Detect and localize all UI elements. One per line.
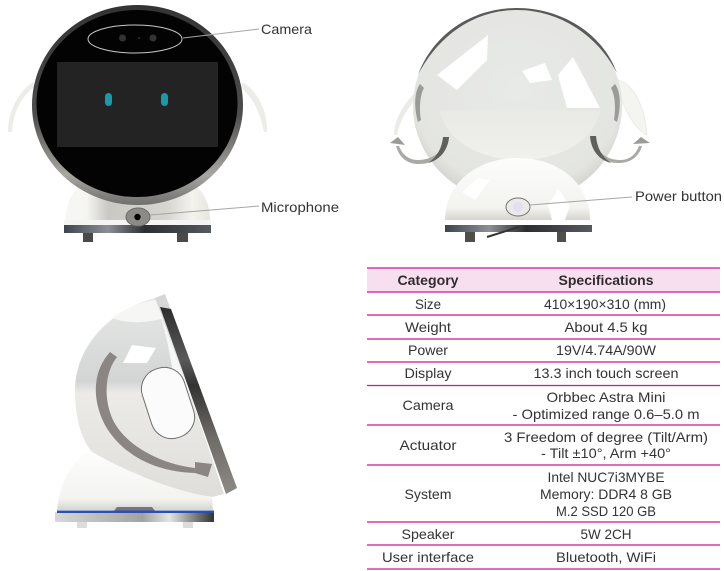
row: actuator xyxy=(400,429,708,461)
left arm xyxy=(8,82,34,132)
header band xyxy=(367,268,720,292)
row: system: Intel NUC7i3MYBE xyxy=(548,469,664,485)
row: camera: Camera xyxy=(402,397,454,413)
camera leader line xyxy=(183,29,259,38)
lower band xyxy=(440,110,600,160)
blue stripe xyxy=(57,510,214,513)
feet xyxy=(83,233,188,242)
row: camera: - Optimized range 0.6–5.0 m xyxy=(512,406,700,422)
base plate xyxy=(64,225,211,233)
row: actuator: Actuator xyxy=(400,437,457,453)
header row: Category xyxy=(398,272,459,288)
bezel xyxy=(155,294,237,492)
spec table xyxy=(367,268,720,569)
base plate xyxy=(445,225,592,232)
highlights xyxy=(437,35,600,108)
base metal xyxy=(55,512,214,522)
upper reflection xyxy=(112,300,165,322)
microphone label: Microphone xyxy=(261,199,339,215)
eyes xyxy=(105,93,168,106)
row: system: System xyxy=(404,486,452,502)
row: display xyxy=(404,365,678,381)
row: power xyxy=(408,342,657,358)
camera lenses xyxy=(119,34,156,42)
grille xyxy=(113,507,156,512)
base dome xyxy=(57,453,213,510)
robot back view xyxy=(390,8,650,242)
arm oval xyxy=(136,362,200,444)
microphone leader line xyxy=(150,206,259,215)
power button leader line xyxy=(530,197,632,205)
outer ring xyxy=(32,5,243,205)
row: camera: Orbbec Astra Mini xyxy=(546,389,666,405)
row: speaker xyxy=(402,526,632,542)
row: size xyxy=(415,296,666,312)
black face xyxy=(36,10,238,197)
row: display: Display xyxy=(404,365,452,381)
bezel-side reflection xyxy=(160,312,192,400)
row: user interface: User interface xyxy=(382,549,474,565)
feet xyxy=(465,232,566,242)
row: weight: Weight xyxy=(405,319,451,335)
sphere xyxy=(413,8,622,204)
row: system: M.2 SSD 120 GB xyxy=(556,503,656,519)
power button xyxy=(506,198,530,216)
row: actuator: 3 Freedom of degree (Tilt/Arm) xyxy=(504,429,708,445)
row: system xyxy=(404,469,672,519)
left arm xyxy=(394,92,418,135)
row: speaker: Speaker xyxy=(402,526,455,542)
head shell xyxy=(75,298,224,497)
camera callout ellipse xyxy=(88,25,182,53)
arrow right xyxy=(590,136,650,163)
row: speaker: 5W 2CH xyxy=(580,526,632,542)
arm slots xyxy=(415,84,620,122)
highlight xyxy=(123,345,156,363)
cable xyxy=(487,227,519,237)
row: system: Memory: DDR4 8 GB xyxy=(540,486,672,502)
header row xyxy=(398,272,654,288)
power button label: Power button xyxy=(635,188,722,204)
row: power: Power xyxy=(408,342,448,358)
row: size: 410×190×310 (mm) xyxy=(544,296,666,312)
camera label: Camera xyxy=(261,21,312,37)
table rules xyxy=(367,268,720,569)
right arm xyxy=(241,82,267,132)
row: user interface: Bluetooth, WiFi xyxy=(556,549,656,565)
screen xyxy=(57,62,218,147)
feet xyxy=(77,522,193,528)
row: actuator: - Tilt ±10°, Arm +40° xyxy=(541,445,671,461)
rotation arrow xyxy=(96,352,212,477)
row: display: 13.3 inch touch screen xyxy=(534,365,678,381)
microphone xyxy=(126,208,150,226)
top rim xyxy=(418,8,617,75)
base dome xyxy=(65,180,210,220)
row: power: 19V/4.74A/90W xyxy=(556,342,657,358)
robot side view xyxy=(55,294,237,528)
robot front view xyxy=(8,5,267,242)
dome highlights xyxy=(462,178,570,220)
header row: Specifications xyxy=(558,272,654,288)
base dome xyxy=(445,158,590,220)
row: size: Size xyxy=(415,296,441,312)
arrow left xyxy=(390,137,449,164)
row: weight xyxy=(405,319,648,335)
row: weight: About 4.5 kg xyxy=(564,319,648,335)
row: camera xyxy=(402,389,700,422)
row: user interface xyxy=(382,549,656,565)
right arm xyxy=(617,80,647,135)
